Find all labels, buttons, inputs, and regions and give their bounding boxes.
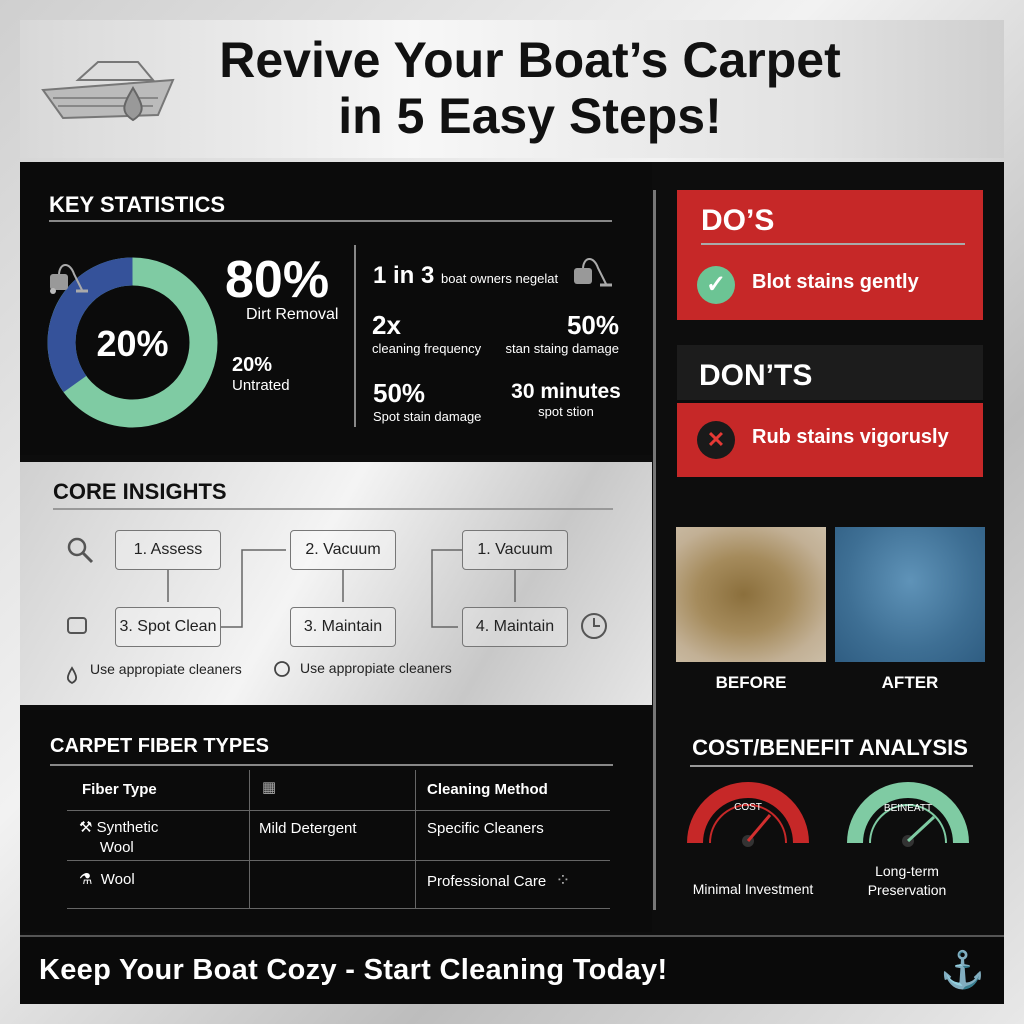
main dark background — [20, 162, 1004, 935]
table: Specific Cleaners — [427, 820, 544, 837]
table — [67, 770, 610, 909]
cost benefit: Long-term — [875, 863, 939, 879]
panel: core insights: 1. Assess — [134, 541, 202, 558]
cost benefit — [687, 735, 973, 898]
panel: do's: Blot stains gently — [752, 271, 919, 293]
heading: CARPET FIBER TYPES — [50, 735, 269, 757]
panel: key statistics: 50% — [567, 310, 619, 340]
after image — [835, 527, 985, 662]
stat: 20% untreated — [232, 354, 290, 394]
icon: x: ✕ — [707, 427, 725, 452]
icon: boat with drop — [41, 61, 174, 122]
icon: vacuum small — [574, 258, 612, 286]
heading: CORE INSIGHTS — [53, 479, 227, 504]
flowchart — [67, 538, 607, 684]
gauges: COST — [734, 802, 762, 813]
table: Mild Detergent — [259, 820, 357, 837]
donut chart: 20% — [96, 323, 169, 364]
notes: Use appropiate cleaners — [90, 661, 242, 677]
panel: core insights: 4. Maintain — [476, 618, 554, 635]
gauges: BEINEATT — [884, 803, 932, 814]
panel: don'ts: DON’TS — [699, 359, 812, 392]
footer: Keep Your Boat Cozy - Start Cleaning Today! — [39, 954, 667, 986]
footer — [20, 935, 1004, 1004]
panel: don'ts: Rub stains vigorusly — [752, 426, 949, 448]
panel: carpet fiber types — [20, 710, 652, 932]
panel: key statistics: spot stion — [538, 404, 594, 419]
panel: do's — [677, 190, 983, 320]
panel: key statistics: 2x — [372, 310, 401, 340]
cost benefit: Preservation — [868, 882, 946, 898]
table: Wool — [100, 839, 134, 856]
title: Revive Your Boat’s Carpet — [219, 32, 841, 88]
icon: x — [697, 421, 735, 459]
table: Professional Care ⁘ — [427, 870, 570, 890]
icon: check — [697, 266, 735, 304]
stat: 20% untreated: 20% — [232, 354, 272, 376]
panel: don'ts — [677, 345, 983, 477]
panel: core insights: Use appropiate cleaners — [300, 660, 452, 676]
stat: 80%: 80% — [225, 251, 329, 309]
header — [20, 20, 1004, 158]
panel: key statistics — [20, 162, 652, 455]
table: Cleaning Method — [427, 781, 548, 798]
panel: key statistics: 50% — [373, 378, 425, 408]
panel: key statistics: Spot stain damage — [373, 409, 481, 424]
panel: core insights — [20, 462, 652, 705]
icon: check: ✓ — [706, 271, 726, 298]
panel: core insights: 1. Vacuum — [477, 541, 553, 558]
stat grid: 1 in 3 boat owners negelat — [373, 262, 558, 289]
title — [219, 32, 841, 144]
panel: core insights: 2. Vacuum — [305, 541, 381, 558]
panel: core insights: 3. Maintain — [304, 618, 382, 635]
table: ▦ — [262, 779, 276, 796]
panel: key statistics: Dirt Removal — [246, 306, 338, 323]
table: ⚒ Synthetic — [79, 819, 158, 836]
panel: core insights: 3. Spot Clean — [120, 618, 216, 635]
gauges — [687, 782, 969, 847]
panel: do's: DO’S — [701, 204, 774, 237]
heading: KEY STATISTICS — [49, 192, 225, 217]
text: BEFORE — [716, 673, 786, 692]
text: AFTER — [882, 673, 938, 692]
title: in 5 Easy Steps! — [338, 88, 722, 144]
panel: key statistics: stan staing damage — [506, 341, 619, 356]
panel: key statistics: 30 minutes — [511, 380, 621, 403]
icon: anchor: ⚓ — [940, 949, 985, 990]
panel: key statistics: cleaning frequency — [372, 341, 481, 356]
icon: vacuum — [50, 264, 88, 294]
table: ⚗ Wool — [79, 871, 135, 888]
cost benefit: COST/BENEFIT ANALYSIS — [692, 735, 968, 760]
table: Fiber Type — [82, 781, 157, 798]
stat: 20% untreated: Untrated — [232, 377, 290, 394]
cost benefit: Minimal Investment — [693, 881, 813, 897]
before image — [676, 527, 826, 662]
donut chart — [48, 258, 218, 428]
divider — [653, 190, 656, 910]
